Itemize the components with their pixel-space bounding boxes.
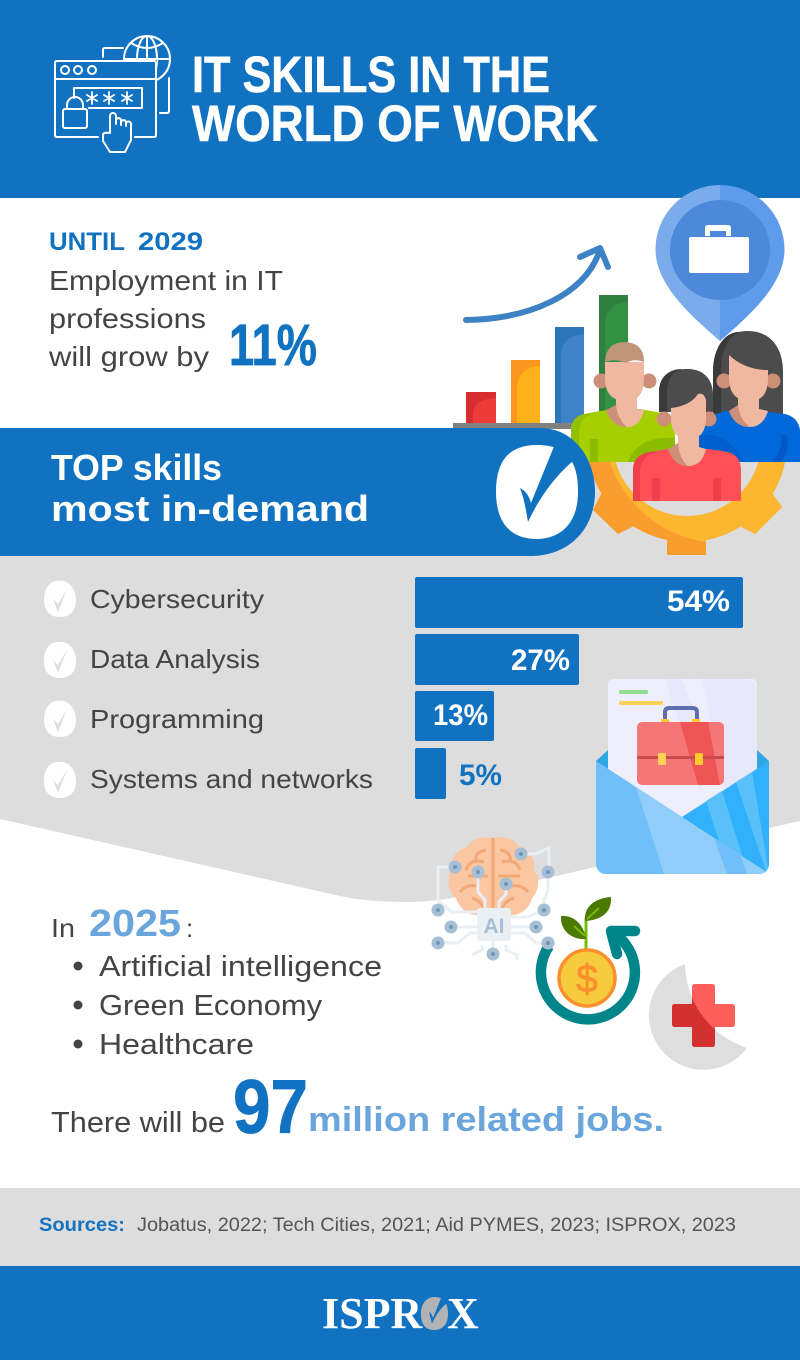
icon: browser window with password and globe	[55, 36, 170, 152]
text block: 2025 sectors	[51, 903, 382, 1061]
title: WORLD OF WORK	[192, 95, 598, 152]
skills list	[44, 581, 373, 798]
footer band with logo: ISPR	[322, 1289, 422, 1338]
footer band with logo: O	[423, 1302, 446, 1335]
skill: programming	[44, 701, 264, 737]
icon: envelope with briefcase	[596, 679, 769, 874]
text block: employment growth: 11%	[229, 313, 317, 378]
icon: green economy coin and plant	[541, 897, 635, 1019]
skill: cybersecurity	[44, 581, 264, 617]
icon: logo check	[421, 1297, 448, 1330]
title: IT SKILLS IN THE	[192, 46, 550, 103]
skill: systems and networks: Systems and networks	[90, 764, 373, 794]
bar chart: skill demand: 54%	[667, 585, 730, 618]
title	[192, 46, 598, 152]
text block: 2025 sectors: Green Economy	[99, 990, 323, 1022]
text block: 2025 sectors: In	[51, 913, 75, 943]
skill: cybersecurity: Cybersecurity	[90, 584, 264, 614]
skill: data analysis: Data Analysis	[90, 644, 260, 674]
skill: data analysis	[44, 642, 260, 678]
callout: 97 million jobs	[51, 1065, 664, 1150]
bar chart: skill demand	[415, 577, 743, 799]
icon: woman in blue shirt	[698, 331, 800, 462]
icon: large check badge	[496, 440, 582, 539]
bar chart: skill demand: 27%	[511, 644, 570, 677]
callout: 97 million jobs: 97	[233, 1065, 308, 1150]
sources band: Jobatus, 2022; Tech Cities, 2021; Aid PYMES, 2023; ISPROX, 2023	[137, 1215, 736, 1236]
text block: employment growth: will grow by	[48, 341, 209, 372]
text block: employment growth	[48, 228, 317, 378]
icon: growth arrow	[466, 248, 608, 320]
text block: 2025 sectors: 2025	[89, 903, 181, 945]
icon: AI brain circuit	[432, 837, 554, 960]
bar chart: skill demand: 13%	[433, 699, 488, 732]
sources band	[0, 1188, 800, 1266]
footer band with logo	[0, 1266, 800, 1360]
header band	[0, 0, 800, 198]
skill: systems and networks	[44, 762, 373, 798]
icon: location pin with briefcase	[655, 185, 785, 341]
icon: growth bar chart	[453, 295, 628, 429]
heading band: top skills: most in-demand	[51, 488, 369, 529]
heading band: top skills: TOP skills	[51, 447, 222, 488]
icon: healthcare cross	[649, 964, 747, 1070]
sources band: Sources:	[39, 1215, 125, 1236]
text block: employment growth: professions	[49, 303, 206, 334]
icon: man in green shirt	[571, 342, 675, 462]
bar chart: skill demand: 5%	[459, 759, 502, 792]
grey skills panel	[0, 462, 800, 902]
heading band: top skills	[0, 428, 595, 556]
icon: AI brain circuit: AI	[484, 915, 504, 938]
icon: gear	[589, 462, 785, 555]
text block: employment growth: 2029	[138, 228, 203, 256]
callout: 97 million jobs: There will be	[51, 1107, 225, 1139]
footer band with logo: X	[447, 1289, 479, 1338]
callout: 97 million jobs: million related jobs.	[308, 1101, 664, 1139]
icon: green economy coin and plant: $	[576, 958, 598, 1001]
text block: employment growth: Employment in IT	[49, 265, 283, 296]
text block: 2025 sectors: Healthcare	[99, 1029, 254, 1061]
skill: programming: Programming	[90, 704, 264, 734]
text block: 2025 sectors: Artificial intelligence	[99, 951, 382, 983]
text block: 2025 sectors: :	[186, 913, 193, 943]
text block: employment growth: UNTIL	[49, 228, 125, 256]
icon: woman in red shirt	[633, 369, 741, 501]
